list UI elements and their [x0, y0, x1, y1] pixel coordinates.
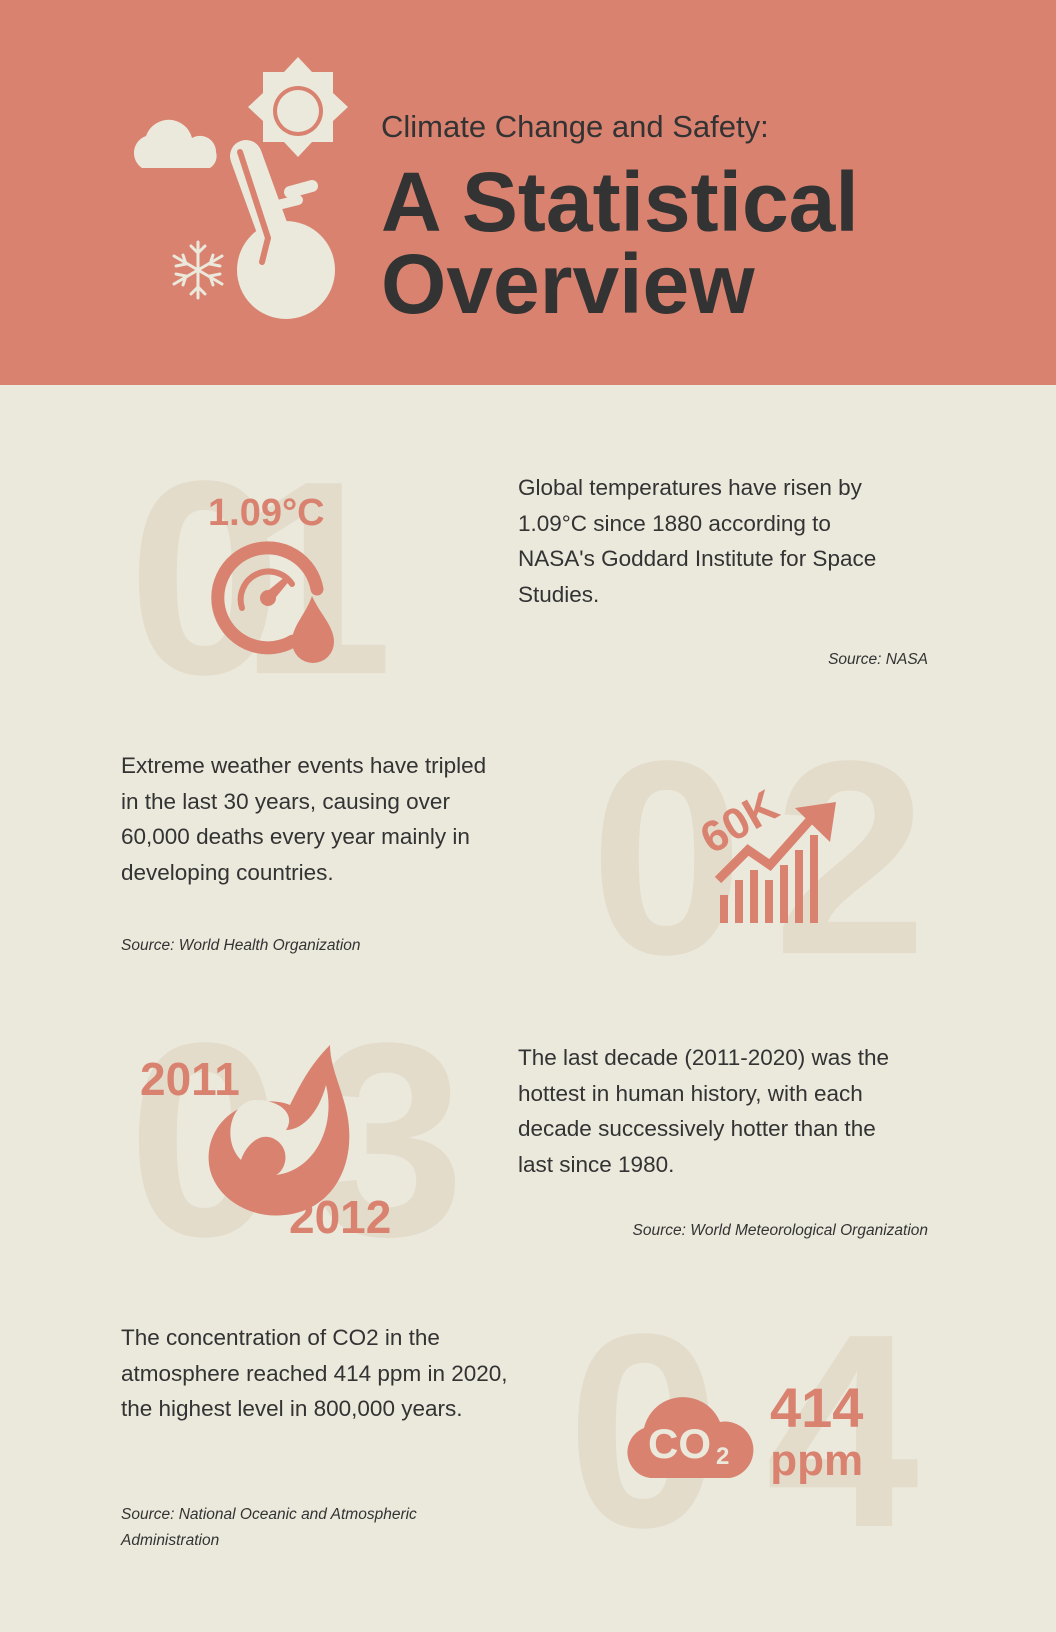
stat 414 ppm: ppm — [770, 1436, 863, 1485]
big number 01: 01 — [128, 424, 351, 732]
icon: gauge with drop — [211, 541, 334, 663]
text 1: NASA's Goddard Institute for Space — [518, 546, 876, 571]
panel 4 — [120, 1277, 964, 1585]
text 1 — [518, 475, 876, 606]
text 1: 1.09°C since 1880 according to — [518, 510, 831, 536]
text 2 — [121, 753, 486, 884]
icon: flame — [208, 1045, 350, 1216]
text 4: the highest level in 800,000 years. — [121, 1396, 462, 1421]
source 2: Source: World Health Organization — [121, 937, 361, 954]
header banner — [0, 0, 1056, 385]
big number 02: 02 — [590, 704, 957, 1012]
source 1: Source: NASA — [828, 651, 928, 668]
text 3: decade successively hotter than the — [518, 1116, 876, 1141]
stat 1.09°C: 1.09°C — [208, 492, 325, 534]
text 4: atmosphere reached 414 ppm in 2020, — [121, 1360, 508, 1386]
text 3: last since 1980. — [518, 1152, 674, 1176]
panel 2 — [121, 704, 957, 1012]
text 3 — [518, 1045, 889, 1176]
text 2: 60,000 deaths every year mainly in — [121, 824, 470, 849]
source 4: Source: National Oceanic and Atmospheric Administration — [121, 1506, 417, 1549]
stat 414 ppm: 414 — [770, 1376, 863, 1439]
label 2012: 2012 — [289, 1191, 391, 1243]
title: Overview — [381, 237, 755, 331]
title: Climate Change and Safety: — [381, 109, 769, 144]
source 3: Source: World Meteorological Organization — [632, 1222, 928, 1239]
icon: CO2 cloud: 2 — [716, 1443, 729, 1470]
icon: growth chart 60K: 60K — [692, 781, 787, 864]
text 3: hottest in human history, with each — [518, 1080, 863, 1106]
title: A Statistical — [381, 155, 859, 249]
stat 414 ppm — [770, 1376, 864, 1485]
title — [381, 109, 859, 331]
panel 1 — [128, 424, 928, 732]
text 2: developing countries. — [121, 860, 334, 884]
icon: CO2 cloud: CO — [648, 1420, 711, 1467]
icon: CO2 cloud — [627, 1397, 754, 1478]
text 1: Studies. — [518, 582, 599, 606]
text 1: Global temperatures have risen by — [518, 475, 862, 500]
panel 3 — [128, 986, 928, 1294]
text 4 — [121, 1325, 508, 1421]
text 3: The last decade (2011-2020) was the — [518, 1045, 889, 1070]
icon: growth chart 60K — [692, 781, 836, 923]
icon: thermometer with sun, cloud, snowflake — [134, 57, 348, 319]
big number 04: 04 — [567, 1277, 964, 1585]
text 4: The concentration of CO2 in the — [121, 1325, 440, 1350]
snowflake — [174, 242, 222, 298]
text 2: in the last 30 years, causing over — [121, 788, 450, 814]
label 2011: 2011 — [140, 1053, 240, 1105]
text 2: Extreme weather events have tripled — [121, 753, 486, 778]
big number 03: 03 — [128, 986, 495, 1294]
